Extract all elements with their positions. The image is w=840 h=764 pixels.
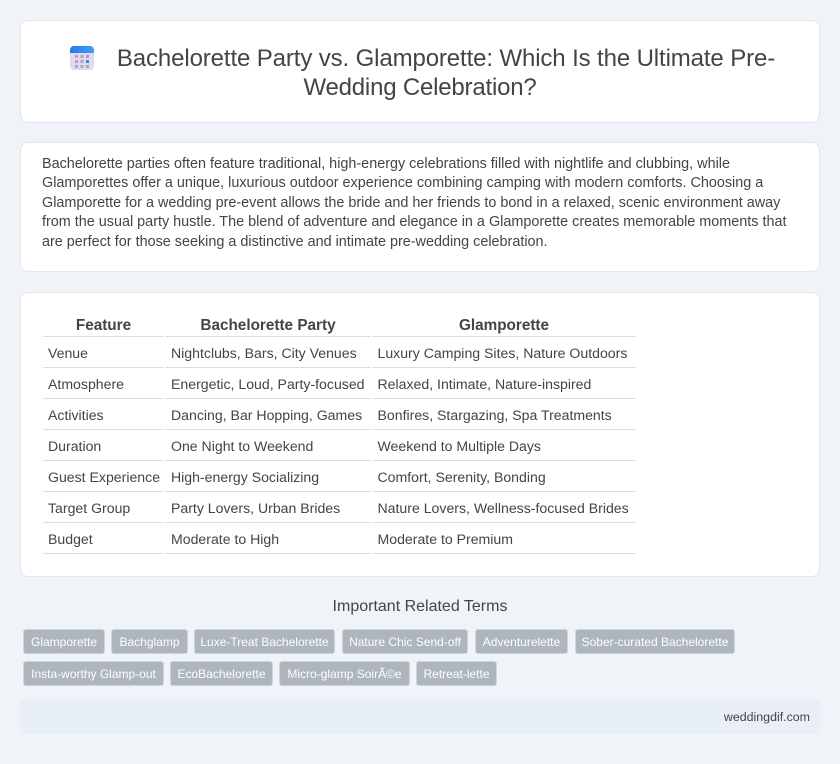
row: guest experience: Comfort, Serenity, Bonding bbox=[378, 469, 546, 485]
row: venue: Venue bbox=[48, 345, 88, 361]
row: target group bbox=[43, 500, 636, 523]
related term tags bbox=[23, 629, 735, 686]
row: atmosphere bbox=[43, 376, 636, 399]
panel: introduction text: Glamporettes offer a unique, luxurious outdoor experience combining camping with modern comforts. Choosing a bbox=[42, 175, 763, 191]
comparison table bbox=[43, 317, 636, 554]
row: activities bbox=[43, 407, 636, 430]
panel: comparison table bbox=[20, 292, 820, 577]
tag bbox=[170, 661, 273, 686]
panel: introduction text bbox=[20, 142, 820, 272]
tag bbox=[23, 629, 105, 654]
tag: Sober-curated Bachelorette bbox=[582, 635, 728, 649]
tag bbox=[279, 661, 410, 686]
panel: introduction text: Glamporette for a wedding pre-event allows the bride and her friends to bond in a relaxed, scenic environment away bbox=[42, 195, 780, 211]
row: activities: Activities bbox=[48, 407, 104, 423]
tag: Adventurelette bbox=[483, 635, 560, 649]
footer bar bbox=[20, 700, 820, 734]
row: atmosphere: Atmosphere bbox=[48, 376, 124, 392]
row: budget: Budget bbox=[48, 531, 93, 547]
row: guest experience bbox=[43, 469, 636, 492]
row: target group: Target Group bbox=[48, 500, 130, 516]
row: duration: Duration bbox=[48, 438, 101, 454]
row: duration bbox=[43, 438, 636, 461]
row: activities: Bonfires, Stargazing, Spa Treatments bbox=[378, 407, 612, 423]
heading: related terms: Important Related Terms bbox=[333, 598, 507, 615]
table header: Glamporette bbox=[459, 317, 549, 334]
tag: Nature Chic Send-off bbox=[349, 635, 461, 649]
tag: EcoBachelorette bbox=[177, 667, 266, 681]
tag: Luxe-Treat Bachelorette bbox=[200, 635, 329, 649]
tag bbox=[23, 661, 164, 686]
row: venue: Luxury Camping Sites, Nature Outdoors bbox=[378, 345, 627, 361]
table header: Bachelorette Party bbox=[200, 317, 336, 334]
row: duration: One Night to Weekend bbox=[171, 438, 313, 454]
tag bbox=[575, 629, 735, 654]
title: Wedding Celebration? bbox=[303, 74, 537, 101]
tag: Bachglamp bbox=[119, 635, 180, 649]
row: budget: Moderate to High bbox=[171, 531, 279, 547]
row: target group: Nature Lovers, Wellness-focused Brides bbox=[378, 500, 629, 516]
row: activities: Dancing, Bar Hopping, Games bbox=[171, 407, 362, 423]
footer site name: weddingdif.com bbox=[724, 710, 810, 724]
tag: Retreat-lette bbox=[423, 667, 490, 681]
tag: Glamporette bbox=[31, 635, 97, 649]
tag bbox=[194, 629, 335, 654]
panel: introduction text: Bachelorette parties often feature traditional, high-energy celebrations filled with nightlife and clubbing, while bbox=[42, 156, 730, 172]
row: budget: Moderate to Premium bbox=[378, 531, 513, 547]
row: atmosphere: Relaxed, Intimate, Nature-inspired bbox=[378, 376, 591, 392]
row: guest experience: High-energy Socializing bbox=[171, 469, 319, 485]
row: atmosphere: Energetic, Loud, Party-focused bbox=[171, 376, 365, 392]
tag: Micro-glamp SoirÃ©e bbox=[287, 667, 402, 681]
tag bbox=[416, 661, 497, 686]
tag bbox=[342, 629, 468, 654]
table header bbox=[43, 317, 636, 337]
row: venue: Nightclubs, Bars, City Venues bbox=[171, 345, 357, 361]
table header: Feature bbox=[76, 317, 131, 334]
tag: Insta-worthy Glamp-out bbox=[31, 667, 156, 681]
panel: introduction text: are perfect for those seeking a distinctive and intimate pre-wedding celebration. bbox=[42, 234, 548, 250]
title: Bachelorette Party vs. Glamporette: Which Is the Ultimate Pre- bbox=[117, 45, 775, 72]
row: venue bbox=[43, 345, 636, 368]
row: target group: Party Lovers, Urban Brides bbox=[171, 500, 340, 516]
row: guest experience: Guest Experience bbox=[48, 469, 160, 485]
icon: calendar bbox=[70, 46, 94, 70]
tag bbox=[111, 629, 188, 654]
panel: introduction text: from the usual party hustle. The blend of adventure and elegance in a Glamporette creates memorable moments that bbox=[42, 214, 786, 230]
tag bbox=[475, 629, 568, 654]
row: budget bbox=[43, 531, 636, 554]
row: duration: Weekend to Multiple Days bbox=[378, 438, 541, 454]
title bbox=[117, 45, 775, 101]
panel: title header bbox=[20, 20, 820, 123]
